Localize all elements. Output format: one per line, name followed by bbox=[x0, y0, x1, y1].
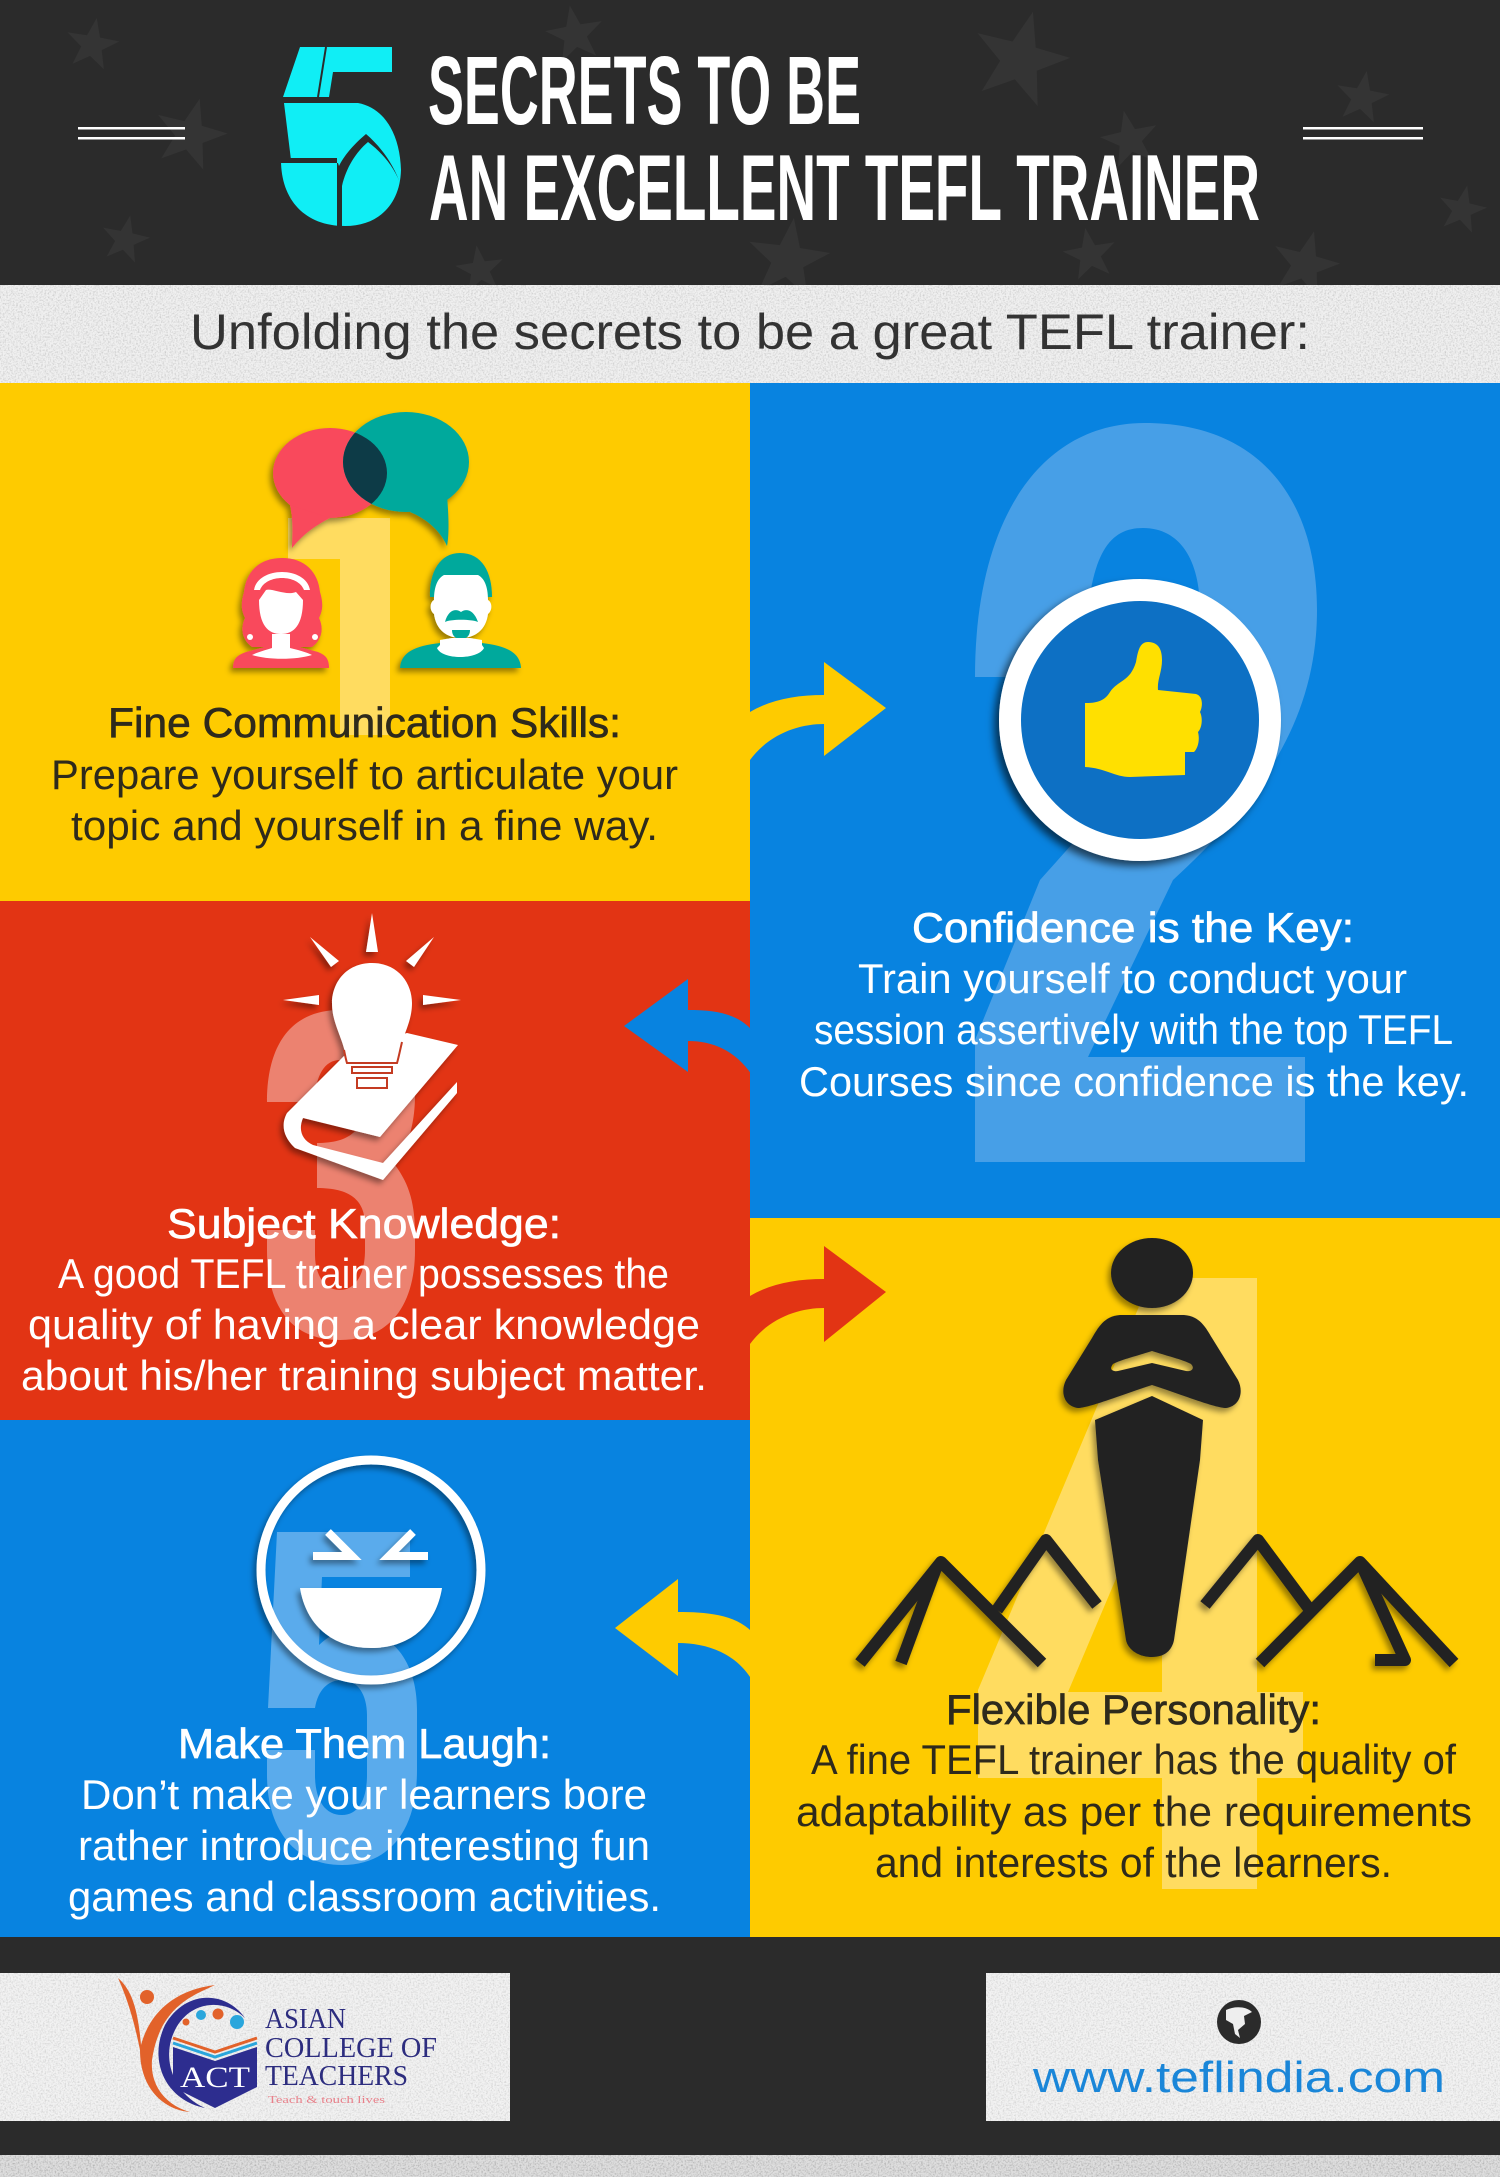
text block: secret 5 bbox=[68, 1720, 661, 1920]
title: SECRETS TO BE bbox=[428, 36, 861, 145]
panel: secret 4 background bbox=[750, 1218, 1500, 1937]
icon: laughing mouth bbox=[300, 1588, 442, 1648]
text block: secret 1: topic and yourself in a fine way. bbox=[71, 802, 658, 849]
icon: thumb bbox=[1085, 642, 1202, 777]
text block: secret 4: A fine TEFL trainer has the quality of bbox=[811, 1736, 1456, 1783]
icon: meditating figure among mountains bbox=[860, 1238, 1454, 1663]
text block: secret 3: Subject Knowledge: bbox=[167, 1200, 561, 1247]
icon: right mountains bbox=[1205, 1540, 1454, 1663]
arrow: red, secret 3 to 4 bbox=[750, 1246, 886, 1344]
icon: woman bbox=[233, 558, 329, 668]
title bbox=[428, 36, 1260, 240]
text block: secret 3 bbox=[21, 1200, 707, 1399]
panel: website card bbox=[986, 1973, 1500, 2121]
icon: book shield bbox=[173, 2047, 257, 2108]
ghost numeral 1 bbox=[288, 518, 390, 735]
icon: left mountains bbox=[860, 1540, 1097, 1663]
college name bbox=[265, 2004, 437, 2092]
icon: teal speech bubble bbox=[343, 412, 469, 546]
text block: secret 1: Fine Communication Skills: bbox=[108, 699, 621, 746]
college name: ASIAN bbox=[265, 2004, 346, 2035]
icon: pink speech bubble bbox=[273, 428, 387, 548]
text block: secret 4 bbox=[796, 1686, 1472, 1886]
text block: secret 2: Courses since confidence is the key. bbox=[799, 1058, 1469, 1105]
text block: secret 1: Prepare yourself to articulate your bbox=[51, 751, 678, 798]
text block: secret 2: session assertively with the top TEFL bbox=[814, 1006, 1453, 1053]
icon: light rays bbox=[283, 913, 461, 1005]
icon: college logo bbox=[118, 1978, 257, 2112]
text block: secret 4: and interests of the learners. bbox=[875, 1839, 1392, 1886]
icon: right double rule bbox=[1303, 127, 1423, 140]
panel: secret 1 background bbox=[0, 383, 750, 901]
ghost numeral 5 bbox=[267, 1532, 417, 1865]
website url: www.teflindia.com bbox=[1032, 2053, 1445, 2102]
icon: speech bubbles and two people bbox=[233, 412, 521, 668]
arrow: blue, secret 2 to 3 bbox=[624, 979, 752, 1075]
icon: man bbox=[400, 553, 521, 668]
text block: secret 5: Don’t make your learners bore bbox=[81, 1771, 647, 1818]
arrow: yellow, secret 4 to 5 bbox=[615, 1579, 752, 1680]
arrow: yellow, secret 1 to 2 bbox=[750, 662, 886, 760]
icon: laughing eyes bbox=[313, 1532, 428, 1556]
icon: book bbox=[284, 1033, 458, 1180]
ghost numeral 3 bbox=[267, 1010, 415, 1340]
panel: secret 5 background bbox=[0, 1420, 750, 1937]
panel: header band bbox=[0, 0, 1500, 301]
college name: TEACHERS bbox=[265, 2061, 408, 2092]
subtitle: Unfolding the secrets to be a great TEFL trainer: bbox=[190, 304, 1310, 360]
text block: secret 2 bbox=[799, 904, 1469, 1105]
text block: secret 4: adaptability as per the requirements bbox=[796, 1788, 1472, 1835]
panel: bottom texture strip bbox=[0, 2155, 1500, 2177]
college tagline: Teach & touch lives bbox=[268, 2094, 385, 2106]
text block: secret 3: about his/her training subject matter. bbox=[21, 1352, 707, 1399]
panel: logo card bbox=[0, 1973, 510, 2121]
text block: secret 3: A good TEFL trainer possesses the bbox=[58, 1250, 669, 1297]
panel: subtitle band bbox=[0, 285, 1500, 383]
text block: secret 5: games and classroom activities. bbox=[68, 1873, 661, 1920]
panel: secret 2 background bbox=[750, 383, 1500, 1218]
text block: secret 3: quality of having a clear knowledge bbox=[28, 1301, 700, 1348]
icon: head bbox=[1111, 1238, 1193, 1308]
college name: COLLEGE OF bbox=[265, 2033, 437, 2064]
icon: body bbox=[1095, 1396, 1203, 1657]
ghost numeral 2 bbox=[975, 423, 1317, 1162]
icon: globe bbox=[1217, 2000, 1261, 2044]
text block: secret 4: Flexible Personality: bbox=[946, 1686, 1321, 1733]
text block: secret 5: Make Them Laugh: bbox=[178, 1720, 551, 1767]
icon: folded arms bbox=[1063, 1315, 1241, 1408]
text block: secret 2: Confidence is the Key: bbox=[912, 904, 1354, 951]
icon: bubble overlap bbox=[343, 432, 387, 504]
icon: lightbulb bbox=[332, 963, 412, 1088]
panel: footer band bbox=[0, 1937, 1500, 2155]
icon: laughing face bbox=[261, 1460, 481, 1680]
icon: lightbulb and book bbox=[283, 913, 461, 1180]
icon: left double rule bbox=[78, 127, 185, 140]
icon: big cyan numeral 5 bbox=[281, 47, 401, 226]
icon: college logo: ACT bbox=[180, 2061, 250, 2094]
ghost numeral 4 bbox=[978, 1278, 1303, 1889]
icon: thumbs up badge bbox=[1010, 590, 1270, 850]
text block: secret 2: Train yourself to conduct your bbox=[858, 955, 1407, 1002]
text block: secret 5: rather introduce interesting fun bbox=[78, 1822, 650, 1869]
text block: secret 1 bbox=[51, 699, 678, 849]
panel: secret 3 background bbox=[0, 901, 750, 1420]
